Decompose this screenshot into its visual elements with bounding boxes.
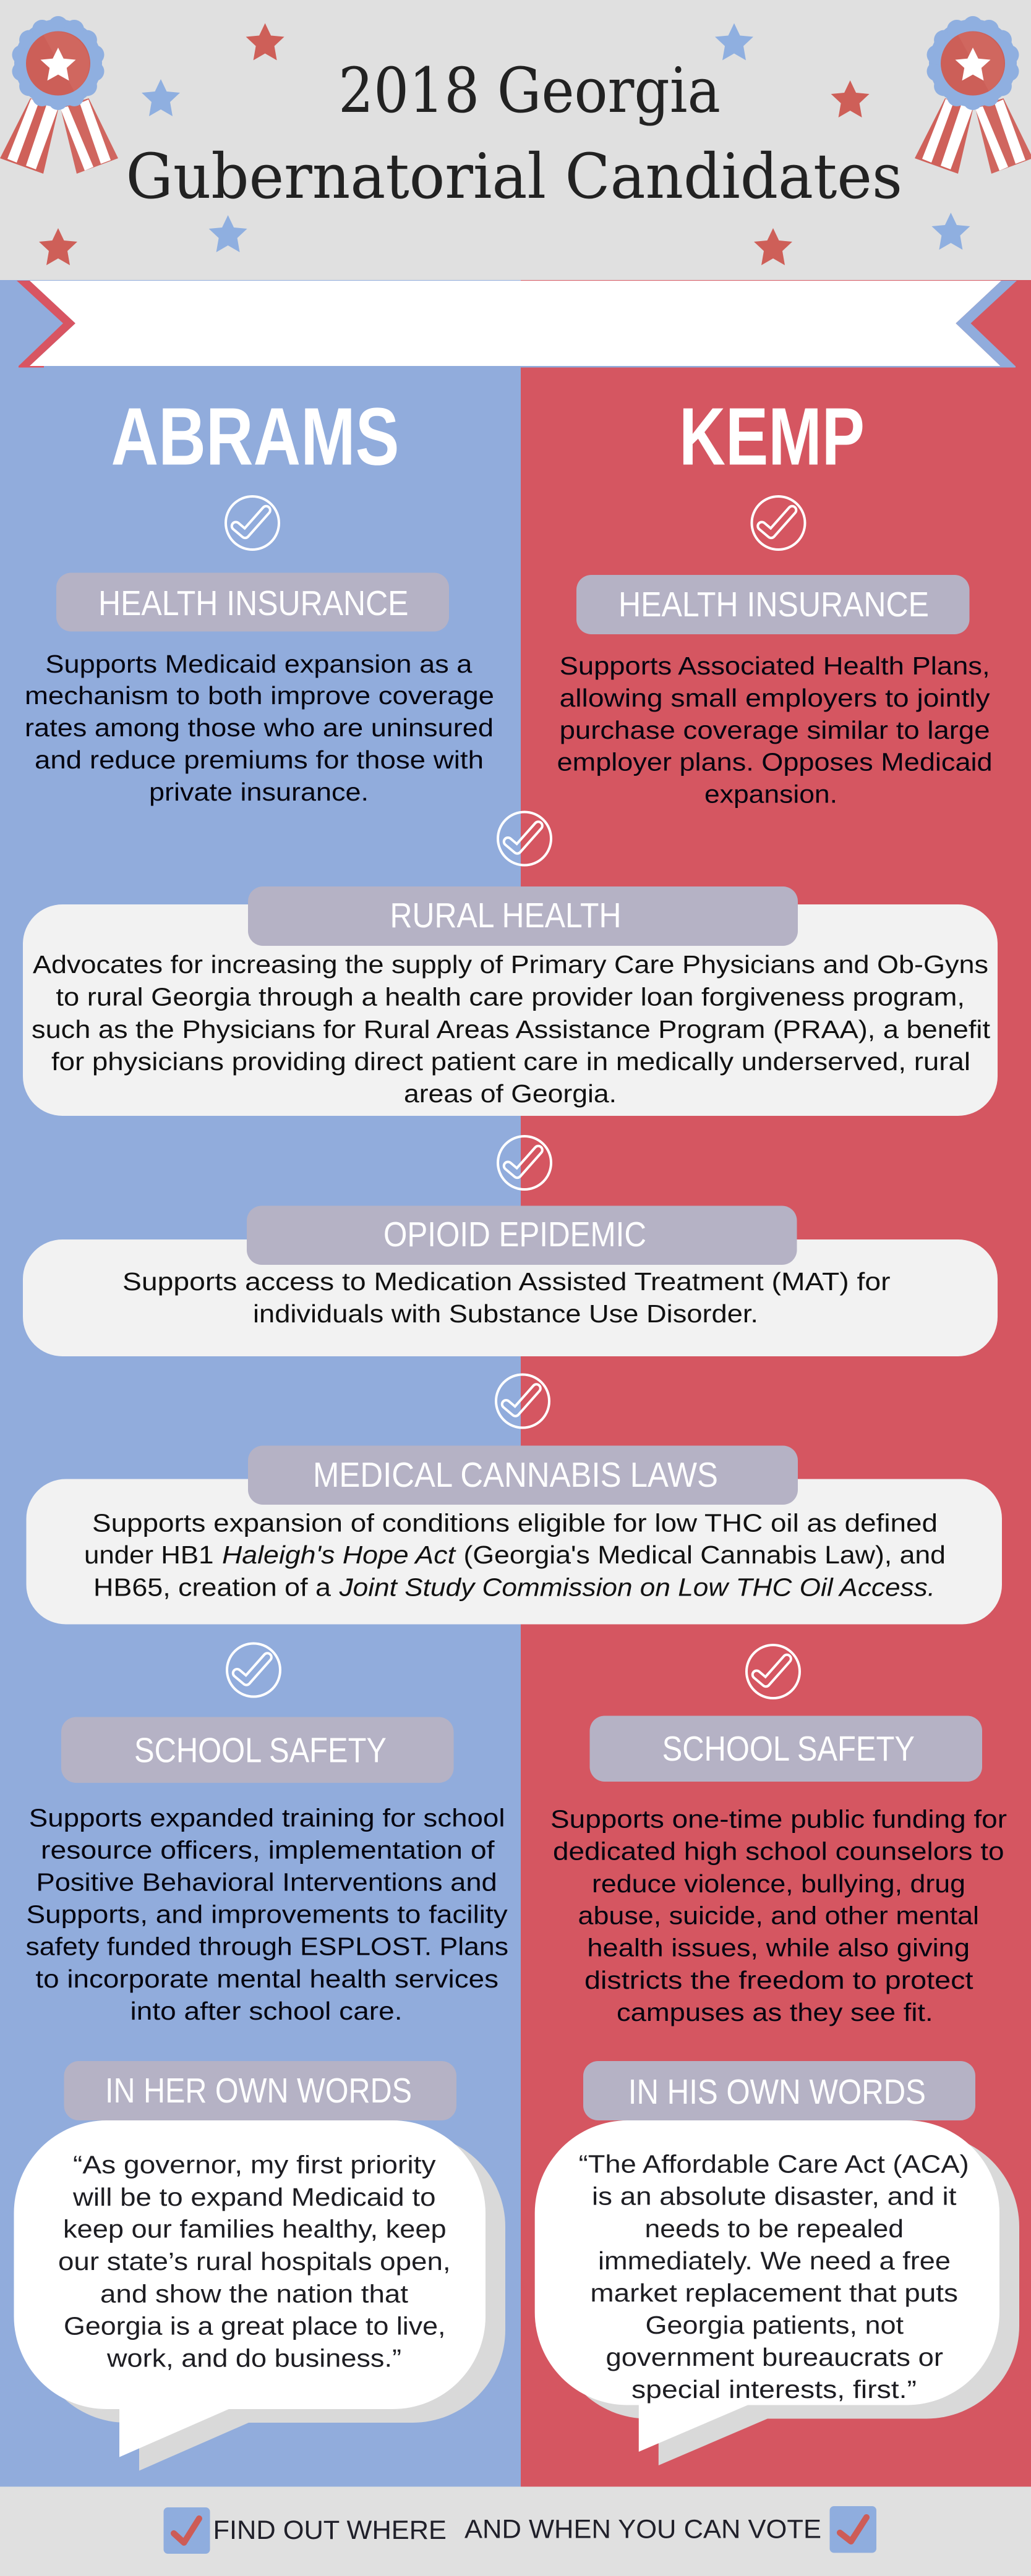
text block: Abrams health insurance: Supports Medicaid expansion as a [45, 650, 473, 678]
text block: Abrams health insurance: rates among those who are uninsured [25, 713, 494, 742]
text block: rural health: to rural Georgia through a health care provider loan forgiveness program, [56, 983, 965, 1011]
pill heading: health insurance Abrams: HEALTH INSURANCE [98, 584, 408, 623]
pill heading: opioid epidemic [247, 1205, 797, 1265]
icon: check school safety Abrams [227, 1643, 280, 1696]
text block: Abrams school safety [26, 1804, 508, 2025]
footer call to action text [213, 2515, 821, 2545]
text block: medical cannabis laws: Joint Study Commission on Low THC Oil Access. [339, 1573, 935, 1601]
text block: Abrams quote: work, and do business.” [106, 2344, 401, 2373]
pill heading: school safety Abrams [61, 1717, 454, 1783]
panel: opioid epidemic [23, 1205, 998, 1356]
speech bubble: Kemp quote [535, 2120, 1019, 2465]
pill heading: medical cannabis laws: MEDICAL CANNABIS LAWS [313, 1455, 718, 1495]
text block: Kemp health insurance [557, 652, 993, 809]
pill heading: school safety Abrams: SCHOOL SAFETY [134, 1731, 387, 1770]
panel: medical cannabis laws [26, 1445, 1002, 1625]
text block: Abrams health insurance: and reduce premiums for those with [35, 746, 484, 774]
text block: rural health [32, 950, 991, 1108]
text block: Kemp school safety: districts the freedom to protect [584, 1966, 973, 1994]
text block: Kemp quote: is an absolute disaster, and it [592, 2182, 957, 2211]
pill heading: opioid epidemic: OPIOID EPIDEMIC [383, 1215, 646, 1254]
text block: Abrams quote: will be to expand Medicaid to [72, 2183, 436, 2211]
text block: medical cannabis laws: Haleigh's Hope Act [222, 1541, 456, 1569]
speech bubble: Abrams quote [14, 2120, 505, 2471]
text block: Kemp quote: market replacement that puts [590, 2279, 958, 2307]
title: 2018 Georgia [338, 54, 721, 127]
text block: Kemp school safety: dedicated high school counselors to [553, 1837, 1004, 1866]
text block: Kemp quote: special interests, first.” [631, 2375, 917, 2404]
panel: header background [0, 0, 1031, 280]
text block: Kemp school safety [550, 1805, 1007, 2026]
text block: Kemp quote: “The Affordable Care Act (ACA) [579, 2150, 969, 2179]
text block: Abrams health insurance: mechanism to both improve coverage [25, 681, 494, 710]
text block: rural health: for physicians providing direct patient care in medically underserved, rural [51, 1047, 970, 1076]
text block: medical cannabis laws: Supports expansion of conditions eligible for low THC oil as defined [92, 1508, 938, 1537]
icon: check medical cannabis [496, 1375, 549, 1428]
text block: Kemp health insurance: expansion. [704, 780, 837, 809]
text block: Kemp school safety: campuses as they see fit. [617, 1998, 933, 2026]
text block: Abrams school safety: resource officers, implementation of [41, 1836, 495, 1864]
text block: Kemp school safety: reduce violence, bullying, drug [592, 1869, 965, 1898]
icon: check school safety Kemp [747, 1645, 800, 1698]
icon: check opioid epidemic [498, 1136, 551, 1189]
pill heading: rural health [248, 886, 798, 946]
title: Gubernatorial Candidates [126, 140, 902, 213]
text block: medical cannabis laws [84, 1508, 946, 1601]
pill heading: school safety Kemp [590, 1716, 982, 1782]
text block: Abrams health insurance [25, 650, 494, 806]
text block: opioid epidemic [122, 1267, 891, 1328]
text block: Kemp quote: needs to be repealed [644, 2214, 904, 2243]
footer call to action text: AND WHEN YOU CAN VOTE [464, 2515, 821, 2544]
pill heading: in his own words [583, 2061, 975, 2120]
panel: Abrams blue column [0, 279, 521, 2487]
text block: Kemp school safety: Supports one-time public funding for [550, 1805, 1007, 1834]
text block: Kemp health insurance: employer plans. Opposes Medicaid [557, 748, 993, 776]
text block: Abrams school safety: Supports, and improvements to facility [26, 1900, 508, 1929]
text block: Kemp health insurance: purchase coverage similar to large [560, 716, 990, 744]
pill heading: rural health: RURAL HEALTH [390, 896, 621, 935]
panel: footer [0, 2486, 1031, 2576]
icon: decorative stars [39, 23, 970, 265]
text block: Kemp health insurance: allowing small employers to jointly [560, 684, 990, 712]
text block: Abrams school safety: Positive Behavioral Interventions and [36, 1868, 497, 1896]
text block: Abrams quote [58, 2151, 451, 2373]
text block: Abrams quote: Georgia is a great place to live, [64, 2312, 445, 2340]
text block: Abrams quote: and show the nation that [100, 2280, 409, 2308]
pill heading: in her own words: IN HER OWN WORDS [105, 2071, 412, 2111]
text block: Abrams school safety: safety funded through ESPLOST. Plans [26, 1932, 508, 1961]
text block: Abrams school safety: Supports expanded training for school [29, 1804, 505, 1832]
text block: Abrams school safety: to incorporate mental health services [35, 1965, 498, 1993]
icon: check rural health [498, 812, 551, 865]
text block: opioid epidemic: Supports access to Medication Assisted Treatment (MAT) for [122, 1267, 891, 1296]
text block: Kemp quote: immediately. We need a free [598, 2247, 951, 2275]
text block: Kemp health insurance: Supports Associated Health Plans, [560, 652, 990, 680]
text block: Kemp school safety: health issues, while also giving [587, 1934, 970, 1962]
icon: right checkbox [830, 2506, 876, 2553]
text block: Kemp quote [579, 2150, 969, 2404]
icon: right rosette ribbon award [915, 16, 1031, 174]
footer call to action text: FIND OUT WHERE [213, 2515, 447, 2545]
banner ribbon [17, 281, 1017, 367]
pill heading: health insurance Kemp [576, 575, 970, 634]
text block: medical cannabis laws: under HB1 [84, 1541, 214, 1569]
panel: rural health [23, 886, 998, 1116]
text block: Kemp quote: government bureaucrats or [606, 2343, 943, 2371]
icon: left rosette ribbon award [0, 16, 118, 174]
pill heading: health insurance Abrams [56, 572, 449, 632]
heading: ABRAMS: ABRAMS [111, 391, 400, 482]
text block: Kemp quote: Georgia patients, not [646, 2311, 904, 2339]
text block: rural health: Advocates for increasing the supply of Primary Care Physicians and Ob-Gyns [33, 950, 988, 979]
title [126, 54, 902, 213]
icon: check Abrams health insurance [226, 496, 279, 550]
text block: Kemp school safety: abuse, suicide, and other mental [578, 1902, 979, 1930]
text block: Abrams quote: our state’s rural hospitals open, [58, 2247, 451, 2276]
text block: rural health: such as the Physicians for Rural Areas Assistance Program (PRAA), a benefit [32, 1015, 991, 1044]
pill heading: medical cannabis laws [248, 1445, 798, 1505]
pill heading: in his own words: IN HIS OWN WORDS [628, 2072, 926, 2112]
text block: Abrams quote: keep our families healthy, keep [63, 2215, 447, 2243]
text block: Abrams quote: “As governor, my first priority [73, 2151, 436, 2179]
text block: medical cannabis laws: (Georgia's Medical Cannabis Law), and [464, 1541, 946, 1569]
text block: medical cannabis laws: HB65, creation of a [93, 1573, 331, 1601]
heading: KEMP: KEMP [679, 391, 865, 482]
icon: left checkbox [163, 2507, 210, 2554]
text block: rural health: areas of Georgia. [404, 1079, 617, 1108]
panel: Kemp red column [521, 279, 1031, 2487]
pill heading: school safety Kemp: SCHOOL SAFETY [662, 1729, 915, 1769]
pill heading: in her own words [64, 2061, 456, 2120]
pill heading: health insurance Kemp: HEALTH INSURANCE [618, 585, 929, 624]
text block: Abrams health insurance: private insurance. [149, 778, 369, 806]
icon: check Kemp health insurance [752, 496, 805, 550]
text block: Abrams school safety: into after school care. [130, 1997, 402, 2025]
text block: opioid epidemic: individuals with Substance Use Disorder. [253, 1299, 758, 1328]
